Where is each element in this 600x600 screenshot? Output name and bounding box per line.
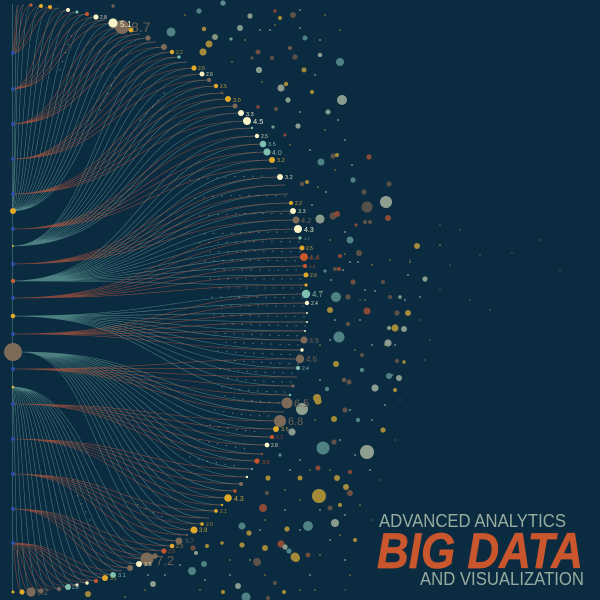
terminal dots on the arc with value labels: 2.5 [261, 134, 268, 140]
orange fan: hub 474 [12, 474, 216, 541]
orange fan: hub 543 [12, 543, 122, 592]
terminal dots on the arc with value labels: 2.4 [311, 301, 318, 307]
scatter: small particles [125, 10, 560, 597]
teal fan: hub 281 [12, 136, 306, 285]
terminal dots on the arc with value labels: 2.5 [220, 84, 227, 90]
orange fan: hub 89 [12, 10, 113, 89]
terminal dots on the arc with value labels: 3.5 [268, 142, 276, 148]
terminal dots on the arc with value labels: 3.5 [281, 427, 289, 433]
terminal dots on the arc with value labels: 6.8 [288, 416, 303, 428]
terminal dots on the arc with value labels: 4.7 [312, 290, 324, 299]
terminal dots on the arc with value labels: 2.8 [100, 15, 107, 21]
terminal dots on the arc with value labels: 2.2 [295, 201, 302, 207]
terminal dots on the arc with value labels: 3.9 [309, 338, 319, 345]
terminal dots on the arc with value labels: 2.2 [176, 50, 183, 56]
terminal dots on the arc with value labels: 2.6 [310, 273, 317, 279]
terminal dots on the arc with value labels: 3.0 [233, 98, 241, 104]
orange fan: hub 404 [12, 404, 280, 461]
terminal dots on the arc with value labels: 2.8 [271, 443, 278, 449]
terminal dots on the arc with value labels: 2.3 [176, 544, 183, 550]
terminal dots on the arc with value labels: 3.5 [144, 562, 152, 568]
terminal dots on the arc with value labels: 3.9 [199, 528, 208, 534]
orange fan: hub 369 [12, 359, 300, 412]
terminal dots on the arc with value labels: 2.8 [72, 585, 79, 591]
terminal dots on the arc with value labels: 4.0 [272, 150, 282, 157]
terminal dots on the arc with value labels: 3.0 [262, 460, 270, 466]
terminal dots on the arc with value labels: 3.3 [246, 112, 254, 118]
terminal dots on the arc with value labels: 2.6 [198, 66, 205, 72]
terminal dots on the arc with value labels: 2.4 [302, 366, 309, 372]
terminal dots on the arc with value labels: 7.2 [156, 553, 174, 568]
terminal dots on the arc with value labels: 4.3 [234, 496, 244, 503]
orange fan: hub 298 [12, 229, 306, 298]
title: advanced analytics: ADVANCED ANALYTICS [379, 511, 566, 531]
terminal dots on the arc with value labels [19, 3, 324, 597]
terminal dots on the arc with value labels: 4.4 [309, 253, 319, 262]
orange fan: hub 334 [12, 294, 307, 350]
orange fan: hub 124 [12, 27, 164, 124]
teal fan: hub 246 [12, 52, 252, 246]
terminal dots on the arc with value labels: 1.7 [304, 236, 310, 241]
teal fan: hub 387 [12, 387, 172, 592]
terminal dots on the arc with value labels: 2.8 [168, 549, 175, 555]
terminal dots on the arc with value labels: 4.5 [253, 117, 263, 126]
terminal dots on the arc with value labels: 5.2 [37, 588, 49, 597]
terminal dots on the arc with value labels: 2.5 [306, 246, 313, 252]
terminal dots on the arc with value labels: 4.6 [306, 355, 318, 364]
left axis hub nodes [4, 51, 22, 594]
terminal dots on the arc with value labels: 2.3 [276, 435, 283, 441]
teal fan: hub 352 [22, 352, 287, 541]
teal fan: hub 316 [12, 294, 307, 395]
terminal dots on the arc with value labels: 2.0 [309, 264, 316, 269]
scatter: larger data points [85, 0, 428, 600]
title: and visualization: AND VISUALIZATION [420, 569, 584, 589]
terminal dots on the arc with value labels: 3.2 [285, 175, 293, 181]
orange fan: hub 53 [12, 5, 59, 53]
terminal dots on the arc with value labels: 3.1 [118, 573, 126, 579]
orange fan: hub 194 [12, 86, 247, 194]
orange fan: hub 439 [12, 439, 252, 505]
terminal dots on the arc with value labels: 4.3 [304, 227, 314, 234]
orange fan: hub 264 [12, 177, 296, 264]
terminal dots on the arc with value labels: 2.6 [206, 72, 213, 78]
terminal dots on the arc with value labels: 5.1 [120, 19, 132, 29]
teal fan: hub 211 to top terminals [12, 5, 164, 211]
orange fan: hub 509 [12, 509, 172, 568]
terminal dots on the arc with value labels: 3.2 [277, 158, 285, 164]
terminal dots on the arc with value labels: 3.7 [185, 538, 194, 545]
orange fan: hub 229 [12, 128, 277, 229]
terminal dots on the arc with value labels: 8.7 [131, 19, 151, 35]
terminal dots on the arc with value labels: 4.2 [301, 216, 311, 225]
dotted particles along the lines [60, 35, 306, 520]
terminal dots on the arc with value labels: 3.1 [110, 576, 117, 582]
terminal dots on the arc with value labels: 6.5 [294, 398, 309, 410]
terminal dots on the arc with value labels: 2.1 [220, 509, 227, 515]
terminal dots on the arc with value labels: 3.3 [298, 209, 306, 215]
terminal dots on the arc with value labels: 2.0 [206, 522, 213, 528]
orange fan: hub 159 [12, 52, 209, 159]
